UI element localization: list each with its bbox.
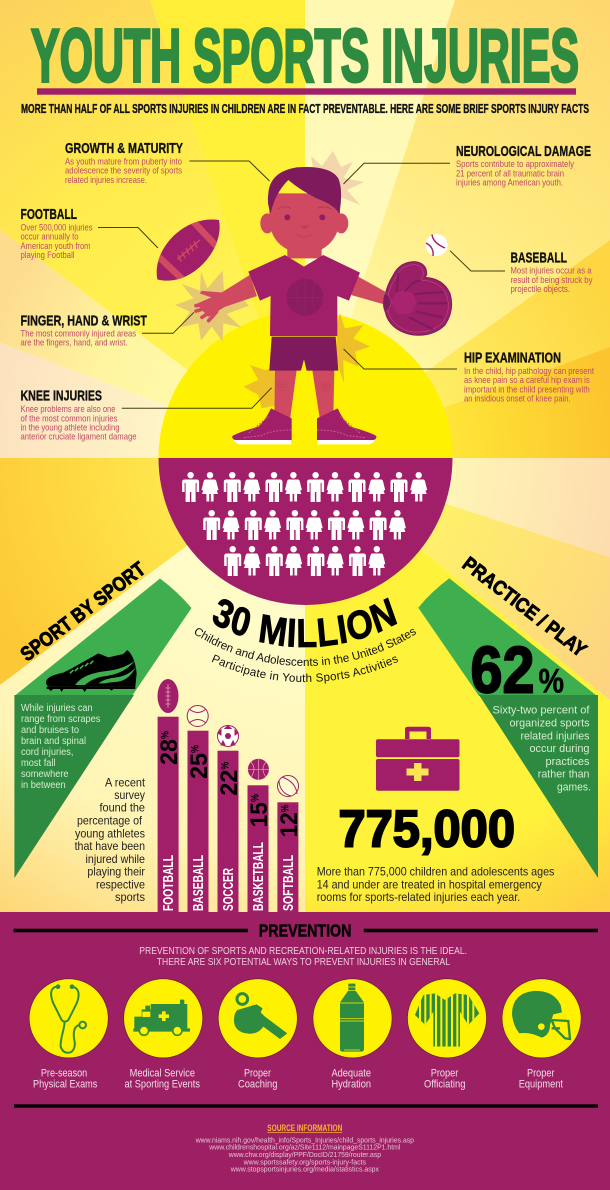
boy: hair — [268, 167, 341, 214]
text: sport by sport description: in between — [21, 780, 66, 791]
callout: baseball: projectile objects. — [510, 284, 570, 295]
callout: football — [20, 207, 158, 261]
boy: right shoe — [317, 408, 376, 444]
callout: finger, hand and wrist — [20, 312, 194, 349]
icon: referee jersey badge — [407, 979, 487, 1058]
text: survey description: respective — [96, 877, 145, 891]
labels: prevention methods: Medical Service — [130, 1068, 195, 1080]
icon: ambulance badge — [124, 979, 203, 1058]
text: practice description: rather than — [538, 769, 590, 781]
text: emergency room description: More than 775,000 children and adolescents ages — [317, 865, 554, 879]
labels: prevention methods: Equipment — [519, 1078, 563, 1090]
panel: sport by sport — [14, 558, 192, 878]
starburst: head injury — [311, 151, 364, 205]
text: practice description — [492, 704, 591, 794]
heading: practice / play: PRACTICE / PLAY — [458, 553, 591, 662]
panel: practice / play — [418, 553, 598, 878]
bar: basketball 15 percent — [246, 785, 273, 912]
boy: shirt — [248, 255, 360, 336]
icon: basketball ball — [248, 759, 269, 780]
text: survey description: sports — [115, 890, 145, 904]
text: source urls: www.childrenshospital.org/az/Site1112/mainpageS1112P1.html — [208, 1145, 401, 1152]
stat: 30 million: 30 MILLION — [212, 598, 398, 648]
callout: neurological damage — [344, 144, 591, 189]
callout: baseball: Most injuries occur as a — [510, 266, 592, 277]
text: survey description: found the — [100, 801, 145, 815]
callout: football: Over 500,000 injuries — [20, 222, 93, 234]
bar: soccer 22 percent — [216, 751, 243, 913]
text: sport by sport description: brain and spinal — [21, 736, 86, 747]
callout: neurological damage: injuries among American youth. — [456, 178, 563, 189]
callout: baseball — [450, 251, 593, 295]
text: survey description — [75, 775, 146, 904]
bar: basketball 15 percent: % — [250, 794, 262, 802]
labels: prevention methods: at Sporting Events — [124, 1078, 200, 1090]
bar: soccer 22 percent: % — [220, 762, 232, 770]
labels: prevention methods — [33, 1068, 563, 1090]
callout: knee injuries: of the most common injuries — [20, 413, 118, 424]
callout: growth and maturity: As youth mature from puberty into — [65, 156, 182, 168]
heading: source information: SOURCE INFORMATION — [267, 1123, 342, 1133]
starburst: hip injury — [337, 313, 370, 383]
text: sport by sport description: range from scrapes — [21, 714, 100, 725]
icon: whistle badge — [218, 979, 297, 1058]
text: emergency room description: rooms for sports-related injuries each year. — [317, 890, 520, 904]
callout: football: American youth from — [20, 241, 91, 252]
bar: basketball 15 percent: BASKETBALL — [250, 842, 267, 911]
callout: knee injuries: anterior cruciate ligament damage — [20, 432, 136, 443]
text: practice description: related injuries — [520, 730, 590, 742]
text: practice description: games. — [557, 782, 591, 794]
background sunburst rays — [0, 0, 610, 912]
callout: hip examination — [344, 349, 594, 404]
text: source urls: www.stopsportsinjuries.org/media/statistics.aspx — [230, 1167, 379, 1174]
labels: prevention methods: Coaching — [238, 1078, 277, 1090]
text: children participating line 2: Participate in Youth Sports Activities — [212, 654, 398, 684]
baseball glove — [383, 262, 452, 335]
bar: soccer 22 percent: SOCCER — [220, 868, 237, 911]
text: sport by sport description: While injuries can — [21, 703, 93, 714]
text: sport by sport description: most fall — [21, 758, 56, 769]
callout: baseball: BASEBALL — [510, 251, 567, 267]
boy: left shoe — [232, 408, 292, 444]
callout: neurological damage: 21 percent of all traumatic brain — [456, 168, 564, 179]
stat: 62 percent: 62 — [470, 632, 534, 706]
yellow and purple central circle — [158, 311, 452, 605]
bar: baseball 25 percent: BASEBALL — [190, 855, 207, 911]
icon: first aid kit — [376, 727, 460, 791]
boy: basketball on shirt — [287, 279, 323, 316]
bar: softball 12 percent — [276, 802, 303, 912]
icon: cleat — [46, 650, 137, 692]
callout: growth and maturity: related injuries increase. — [65, 175, 147, 186]
icon: water bottle badge — [313, 979, 392, 1058]
bar: football 28 percent: 28 — [156, 739, 183, 765]
boy: eyes and brows — [278, 207, 332, 220]
football — [155, 220, 220, 282]
starburst: knee injury — [243, 365, 277, 408]
bar: basketball 15 percent: 15 — [246, 802, 273, 827]
heading: prevention — [14, 921, 598, 941]
callout: neurological damage: Sports contribute to approximately — [456, 159, 574, 170]
callout: finger, hand and wrist: FINGER, HAND & WRIST — [20, 314, 147, 330]
text: survey description: survey — [114, 788, 145, 802]
callout: knee injuries — [20, 388, 272, 443]
callout: baseball: result of being struck by — [510, 275, 593, 286]
callout: hip examination: an insidious onset of knee pain. — [464, 393, 571, 404]
callout: finger, hand and wrist: The most commonly injured areas — [20, 329, 136, 340]
labels: prevention methods: Officiating — [424, 1078, 465, 1090]
boy: arms and hand — [196, 275, 385, 321]
icon: soccer ball — [218, 726, 238, 746]
callout: knee injuries: Knee problems are also one — [20, 404, 116, 415]
text: source urls: www.niams.nih.gov/health_info/Sports_Injuries/child_sports_injuries.asp — [195, 1137, 414, 1144]
boy: knee marks — [278, 382, 330, 391]
text: prevention intro: PREVENTION OF SPORTS AND RECREATION-RELATED INJURIES IS THE IDEAL. — [139, 945, 467, 957]
text: source urls: www.chw.org/display/PPF/DocID/21759/router.asp — [228, 1152, 381, 1159]
labels: prevention methods: Hydration — [332, 1078, 371, 1090]
callout: growth and maturity: adolescence the severity of sports — [65, 166, 182, 177]
text: survey description: that have been — [75, 839, 145, 853]
heading: sport by sport: SPORT BY SPORT — [17, 558, 150, 666]
callout: growth and maturity: GROWTH & MATURITY — [65, 141, 183, 157]
text: practice description: organized sports — [510, 717, 590, 729]
baseball — [426, 234, 448, 256]
callout: knee injuries: KNEE INJURIES — [20, 389, 102, 405]
illustration: boy — [196, 167, 385, 444]
labels: prevention methods: Adequate — [332, 1068, 371, 1080]
text: source urls — [195, 1137, 414, 1174]
text: prevention intro: THERE ARE SIX POTENTIAL WAYS TO PREVENT INJURIES IN GENERAL — [157, 956, 450, 968]
text: sport by sport description: cord injuries, — [21, 747, 74, 758]
callout: football: playing Football — [20, 250, 74, 261]
labels: prevention methods: Proper — [527, 1068, 555, 1080]
stat: 775,000: 775,000 — [338, 801, 515, 859]
bar: baseball 25 percent — [186, 731, 213, 913]
text: survey description: injured while — [86, 852, 145, 866]
boy: ears — [260, 213, 348, 233]
boy: legs — [274, 370, 334, 420]
text: children participating line 1: Children and Adolescents in the United States — [195, 628, 416, 666]
bar: softball 12 percent: 12 — [276, 812, 303, 837]
boy: face and neck — [269, 193, 340, 258]
text: sport by sport description: and bruises to — [21, 725, 79, 736]
icon: helmet badge — [502, 979, 581, 1058]
panel: prevention — [0, 912, 610, 1190]
text: source urls: www.sportssafety.org/sports-injury-facts — [243, 1159, 366, 1166]
text: prevention intro — [139, 945, 467, 968]
text: emergency room description — [317, 865, 554, 904]
bar: softball 12 percent: % — [280, 804, 292, 812]
bar: baseball 25 percent: % — [190, 745, 202, 753]
title underline bar — [37, 88, 576, 95]
bar chart: injuries by sport — [156, 679, 303, 913]
callout: knee injuries: in the young athlete including — [20, 422, 120, 433]
callout: finger, hand and wrist: are the fingers, hand, and wrist. — [20, 338, 128, 349]
text: survey description: playing their — [87, 865, 145, 879]
text: survey description: young athletes — [75, 826, 145, 840]
boy: shorts — [269, 337, 338, 371]
starburst: hand injury — [175, 271, 249, 342]
text: survey description: percentage of — [77, 814, 143, 828]
callout: growth and maturity — [65, 141, 270, 186]
callout: hip examination: HIP EXAMINATION — [464, 350, 561, 366]
pictogram: rows of children — [182, 472, 427, 576]
callout: football: occur annually to — [20, 232, 78, 243]
labels: prevention methods: Physical Exams — [33, 1078, 98, 1090]
bar: football 28 percent — [156, 717, 183, 913]
stat: 62 percent: % — [538, 662, 564, 700]
divider bar — [14, 1104, 598, 1108]
labels: prevention methods: Pre-season — [41, 1068, 87, 1080]
boy: lower body — [232, 337, 376, 444]
callout: football: FOOTBALL — [20, 207, 77, 223]
text: practice description: practices — [546, 756, 590, 768]
icon: baseball ball — [187, 706, 208, 726]
text: sport by sport description — [21, 703, 100, 791]
text: sport by sport description: somewhere — [21, 769, 69, 780]
boy: nose and mouth — [297, 226, 312, 237]
text: practice description: occur during — [530, 743, 590, 755]
text: emergency room description: 14 and under are treated in hospital emergency — [317, 877, 542, 891]
icon: stethoscope badge — [29, 979, 108, 1058]
bar: football 28 percent: FOOTBALL — [160, 855, 177, 911]
labels: prevention methods: Proper — [431, 1068, 459, 1080]
heading: prevention: PREVENTION — [259, 921, 351, 941]
icon: football ball — [158, 679, 178, 713]
bar: softball 12 percent: SOFTBALL — [280, 855, 297, 911]
bar: football 28 percent: % — [160, 731, 172, 739]
bar: soccer 22 percent: 22 — [216, 770, 243, 796]
boy: upper body and head — [196, 167, 385, 336]
bar: baseball 25 percent: 25 — [186, 753, 213, 779]
labels: prevention methods: Proper — [244, 1068, 271, 1080]
icon: softball ball — [278, 776, 298, 796]
text: practice description: Sixty-two percent of — [492, 704, 590, 716]
text: survey description: A recent — [105, 775, 146, 789]
